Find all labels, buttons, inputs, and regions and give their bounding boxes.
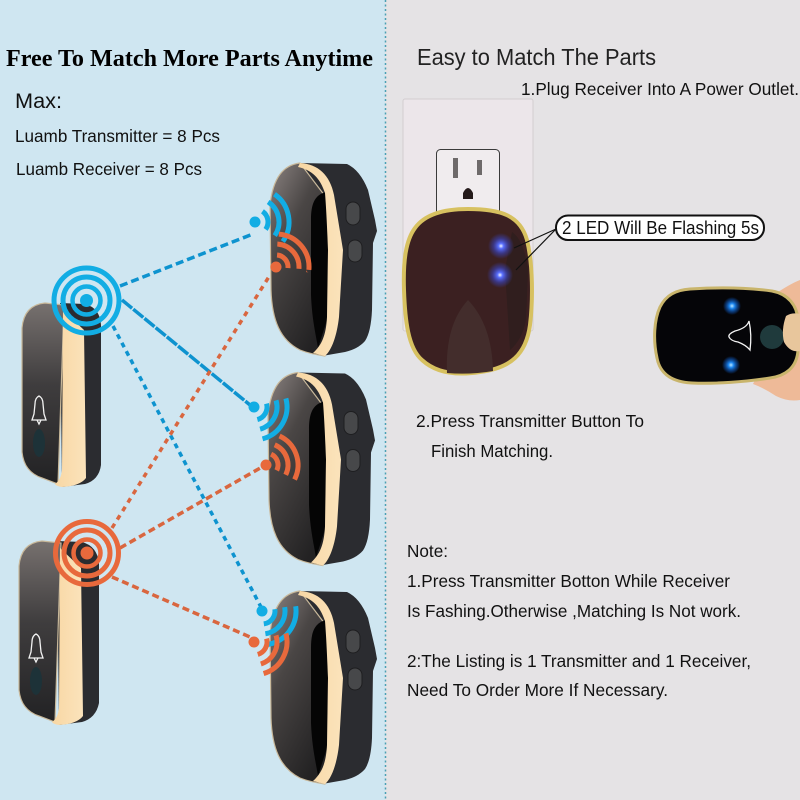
callout arrows	[514, 229, 556, 270]
text: step 1: 1.Plug Receiver Into A Power Outlet.	[521, 79, 799, 99]
panel: right background	[385, 0, 800, 800]
transmitter 1	[22, 303, 101, 487]
hand pressing transmitter	[655, 280, 800, 400]
icon: orange wifi receiver 1	[240, 231, 312, 303]
title: right heading: Easy to Match The Parts	[417, 44, 656, 70]
text: step 2	[416, 411, 644, 461]
icon: blue wifi receiver 1	[208, 175, 302, 269]
icon: orange concentric signal rings	[56, 522, 118, 584]
receiver plugged into outlet	[404, 209, 532, 374]
panel: left background	[0, 0, 385, 800]
icon: receiver LED upper	[488, 233, 514, 259]
title: left heading: Free To Match More Parts Anytime	[6, 45, 373, 72]
icon: orange wifi receiver 2	[223, 422, 309, 508]
icon: blue wifi receiver 2	[214, 367, 294, 447]
text: note: 2:The Listing is 1 Transmitter and 1 Receiver,	[407, 651, 751, 671]
text: note: Is Fashing.Otherwise ,Matching Is Not work.	[407, 601, 741, 621]
icon: receiver LED lower	[487, 262, 513, 288]
text: step 2: Finish Matching.	[431, 441, 553, 461]
icon: blue concentric signal rings	[54, 268, 119, 333]
text: note: Need To Order More If Necessary.	[407, 680, 668, 700]
text: step 2: 2.Press Transmitter Button To	[416, 411, 644, 431]
receiver 2	[268, 372, 375, 566]
icon: orange wifi receiver 3	[214, 602, 294, 682]
text: receiver count: Luamb Receiver = 8 Pcs	[16, 159, 202, 179]
blue dashed signal lines	[113, 234, 261, 607]
transmitter 2	[19, 541, 99, 725]
icon: blue wifi receiver 3	[224, 573, 300, 649]
receiver 1	[270, 163, 377, 356]
text: note: Note:	[407, 541, 448, 561]
callout: LED flashing: 2 LED Will Be Flashing 5s	[562, 218, 759, 238]
wall plate and outlet	[403, 99, 533, 331]
heading: maximum: Max:	[15, 90, 62, 113]
text: note: 1.Press Transmitter Botton While Receiver	[407, 571, 730, 591]
text: transmitter count: Luamb Transmitter = 8 Pcs	[15, 126, 220, 146]
text: note	[407, 541, 751, 700]
orange dashed signal lines	[112, 275, 270, 637]
receiver 3	[270, 591, 377, 784]
